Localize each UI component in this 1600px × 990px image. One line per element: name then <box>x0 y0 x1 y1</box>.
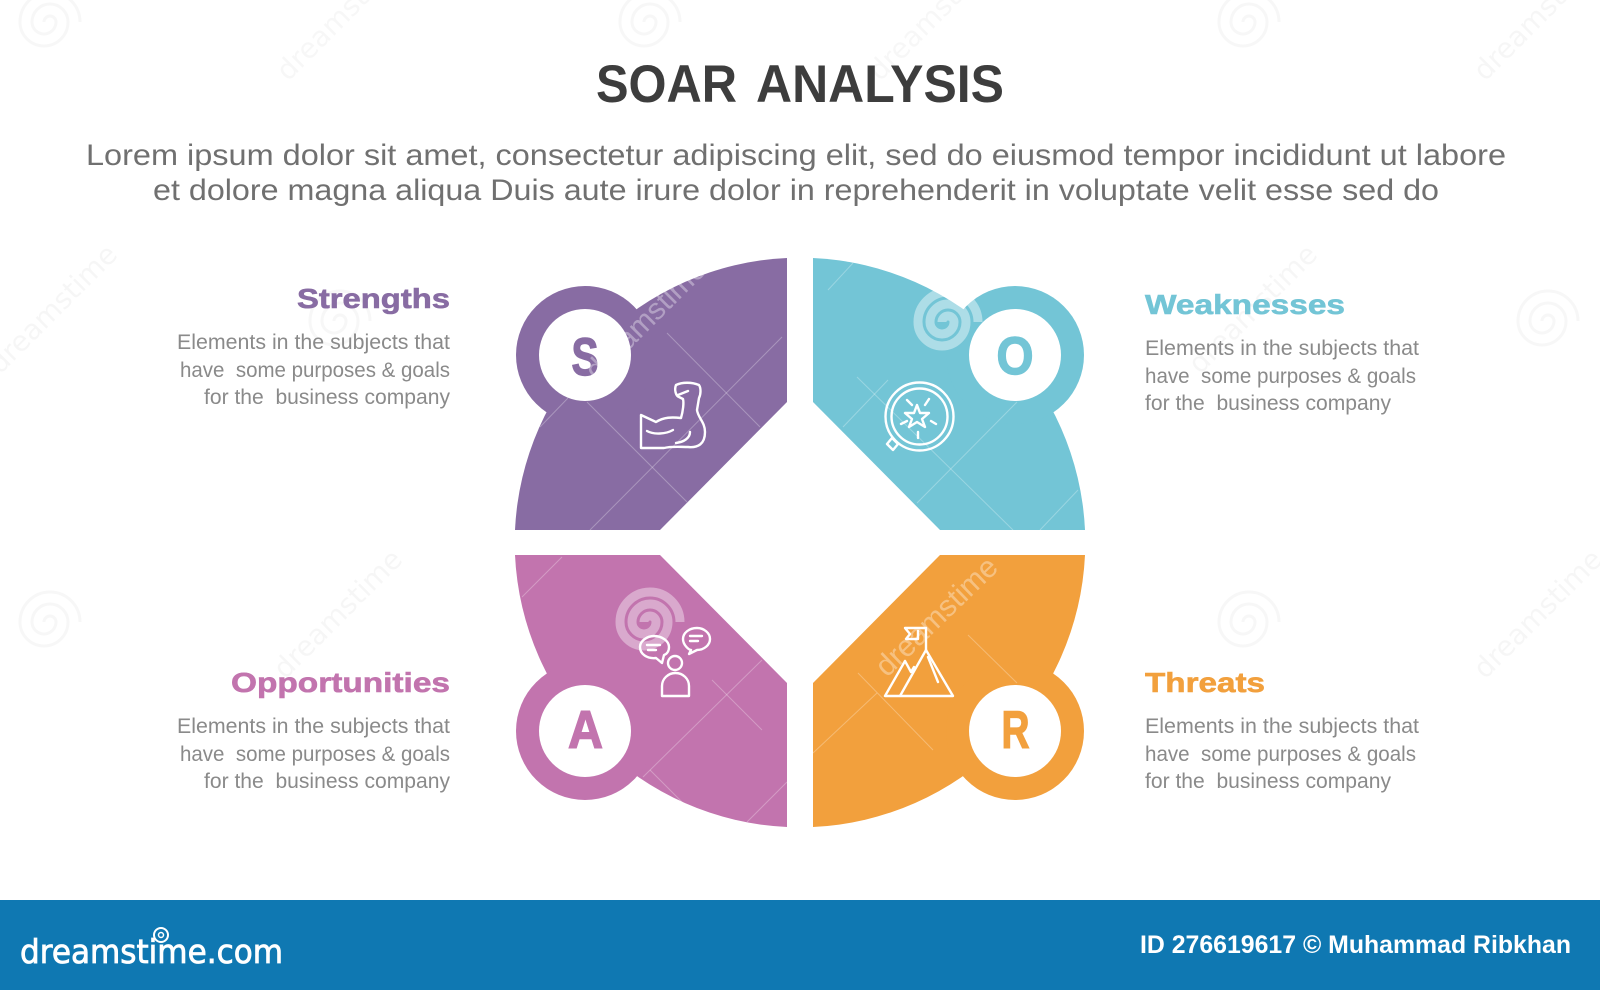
panel: threats quadrant: dreamstime <box>869 550 1005 683</box>
text block: weaknesses <box>1145 289 1419 415</box>
footer logo: dreamstime.com <box>20 932 283 971</box>
badge R <box>969 685 1061 777</box>
text block: opportunities: Opportunities <box>231 667 450 698</box>
title <box>596 55 1004 114</box>
text block: strengths: Elements in the subjects that <box>177 331 450 354</box>
text block: weaknesses: Weaknesses <box>1145 289 1345 320</box>
text block: opportunities: for the business company <box>204 770 450 793</box>
panel: opportunities quadrant <box>515 555 787 827</box>
text block: opportunities: Elements in the subjects that <box>177 715 450 738</box>
icon: star badge <box>886 382 954 450</box>
badge S: S <box>572 328 598 387</box>
panel: strengths quadrant: dreamstime <box>579 253 713 387</box>
icon: person with speech bubbles <box>640 628 710 696</box>
footer credit: ID 276619617 © Muhammad Ribkhan <box>1140 931 1571 959</box>
text block: threats <box>1145 667 1419 793</box>
badge O: O <box>996 327 1034 386</box>
badge A <box>539 685 631 777</box>
text block: threats: for the business company <box>1145 770 1391 793</box>
orange quadrant shape <box>813 555 1085 827</box>
text block: strengths: have some purposes & goals <box>180 359 450 382</box>
text block: strengths <box>177 283 450 409</box>
blue quadrant shape <box>813 258 1085 530</box>
title: SOAR <box>596 55 737 114</box>
text block: weaknesses: Elements in the subjects that <box>1145 337 1419 360</box>
subtitle text block <box>86 139 1506 207</box>
text block: strengths: for the business company <box>204 386 450 409</box>
panel: strengths quadrant <box>515 253 787 530</box>
pink quadrant shape <box>515 555 787 827</box>
badge O <box>969 309 1061 401</box>
text block: opportunities: have some purposes & goals <box>180 743 450 766</box>
icon: flexed arm <box>641 383 705 448</box>
panel: threats quadrant <box>813 550 1085 827</box>
badge S <box>539 309 631 401</box>
text block: weaknesses: for the business company <box>1145 392 1391 415</box>
subtitle text block: Lorem ipsum dolor sit amet, consectetur adipiscing elit, sed do eiusmod tempor incididunt ut labore <box>86 139 1506 172</box>
text block: threats: Elements in the subjects that <box>1145 715 1419 738</box>
text: dreamstime <box>267 543 409 685</box>
subtitle text block: et dolore magna aliqua Duis aute irure dolor in reprehenderit in voluptate velit esse sed do <box>153 174 1439 207</box>
panel: weaknesses quadrant <box>813 258 1085 530</box>
badge A: A <box>568 701 603 760</box>
purple quadrant shape <box>515 258 787 530</box>
text: dreamstime <box>1182 238 1324 380</box>
text block: threats: have some purposes & goals <box>1145 743 1416 766</box>
text block: threats: Threats <box>1145 667 1265 698</box>
icon: mountain with flag <box>885 628 953 696</box>
badge R: R <box>1002 701 1030 760</box>
footer bar <box>0 900 1600 990</box>
text block: weaknesses: have some purposes & goals <box>1145 365 1416 388</box>
text block: strengths: Strengths <box>297 283 450 314</box>
text block: opportunities <box>177 667 450 793</box>
title: ANALYSIS <box>756 55 1004 114</box>
